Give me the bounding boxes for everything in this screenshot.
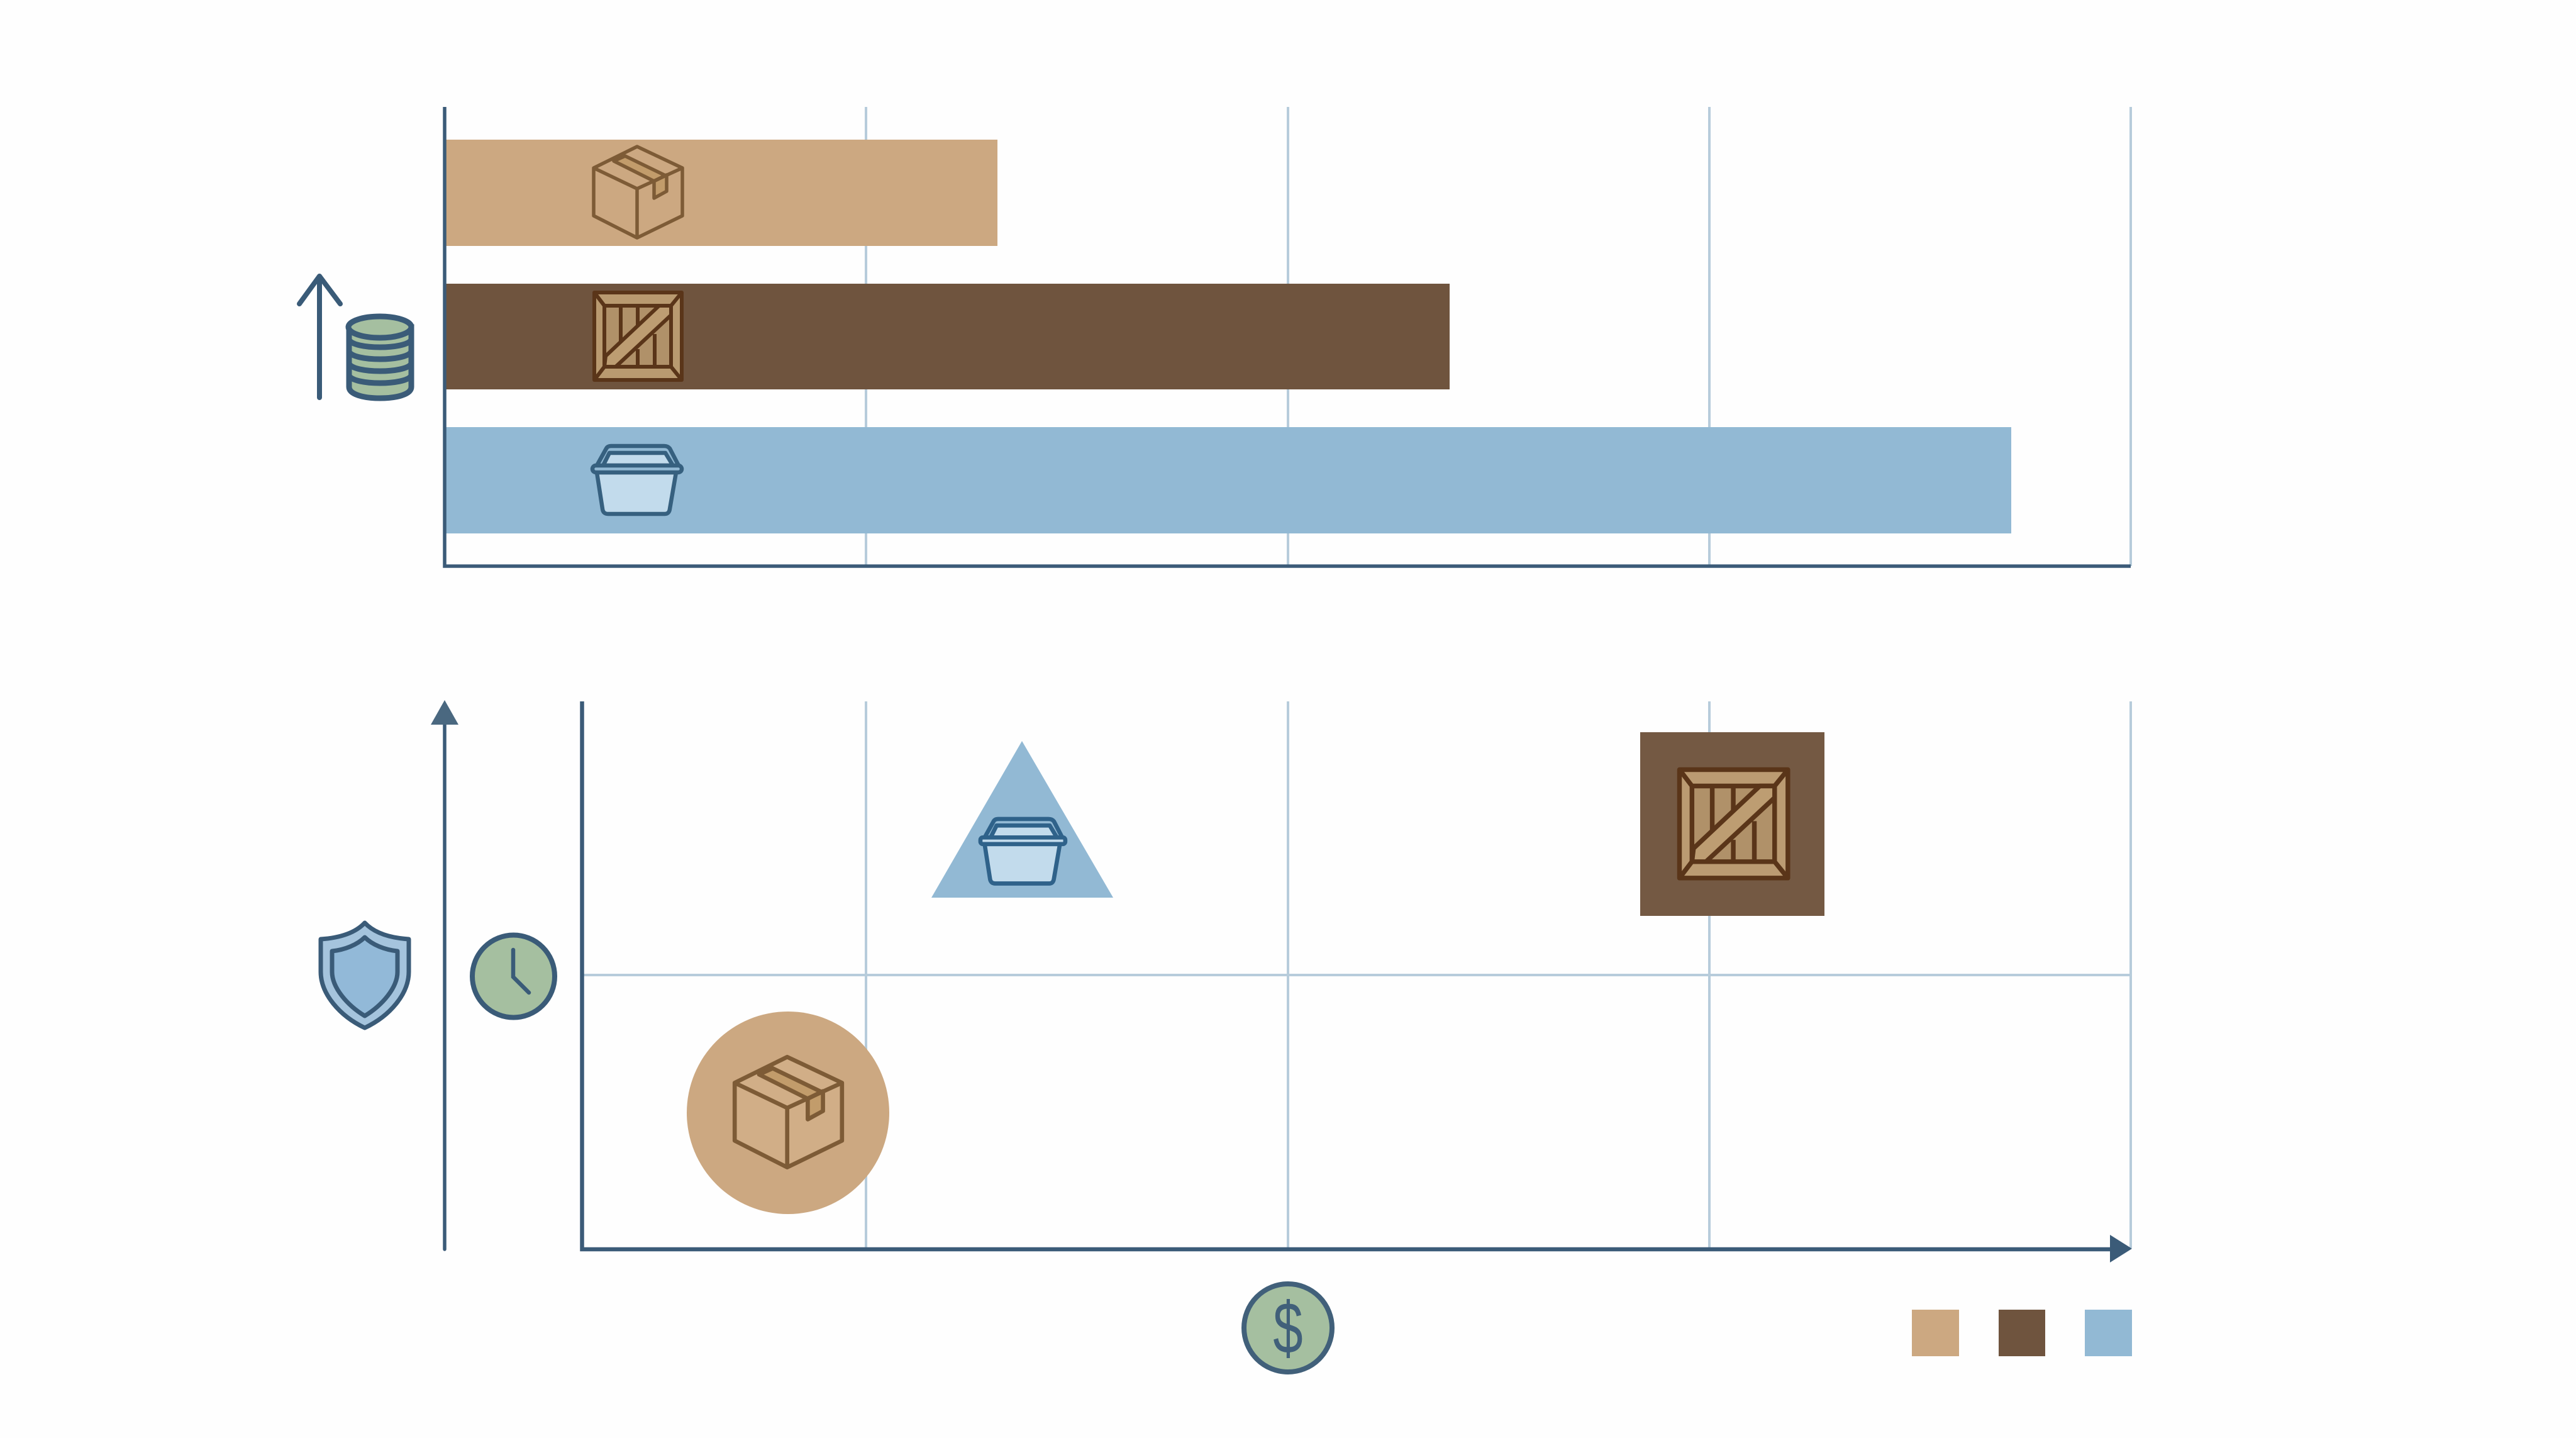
legend swatch: wood (1999, 1310, 2045, 1356)
icon: wooden crate (1679, 769, 1788, 878)
icon: dollar coin: $ (1273, 1287, 1303, 1369)
icon: dollar coin (1244, 1284, 1332, 1372)
axes: top chart (445, 107, 2131, 566)
icon: plastic tote in bar (592, 446, 682, 514)
icon: cardboard box (735, 1057, 842, 1168)
top chart: cost bars (445, 107, 2131, 566)
icon: wooden crate in bar (594, 293, 682, 380)
legend swatch: plastic (2085, 1310, 2132, 1356)
arrow: cost increases (299, 276, 340, 398)
bar: wooden crate (446, 284, 1450, 389)
legend: colour swatches (1912, 1310, 2132, 1356)
axes: plot frame (582, 701, 2132, 1262)
icon: plastic tote (980, 819, 1065, 883)
legend swatch: cardboard (1912, 1310, 1959, 1356)
marker: wooden crate square (1640, 732, 1824, 916)
marker: cardboard box circle (687, 1012, 889, 1214)
icon: up arrow with coin stack (299, 276, 411, 398)
y-axis arrow: bottom chart (431, 700, 458, 1249)
icon: shield (321, 923, 409, 1028)
marker: plastic tote triangle (931, 741, 1113, 898)
icon: clock (472, 935, 555, 1018)
icon: coin stack (348, 316, 411, 398)
bar: cardboard box (446, 140, 997, 246)
bottom chart: quadrant positioning (582, 701, 2132, 1262)
icon: cardboard box in bar (594, 147, 682, 238)
bar: plastic tote (446, 427, 2011, 533)
